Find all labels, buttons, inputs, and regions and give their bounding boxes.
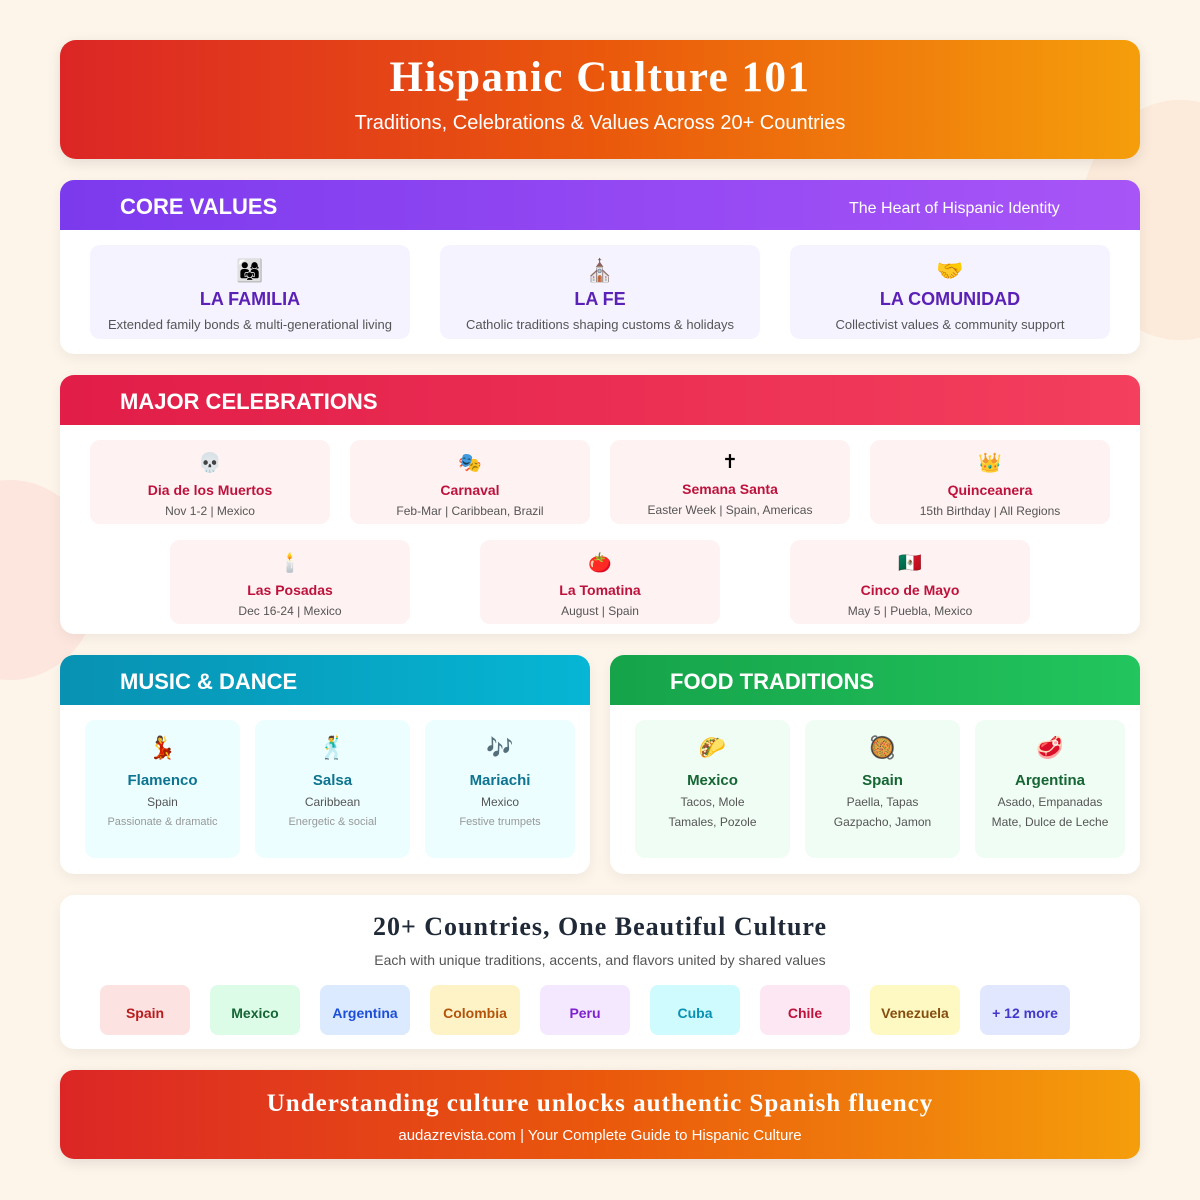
pills: countries: Cuba <box>678 1005 712 1021</box>
card: dia de los muertos: Dia de los Muertos <box>148 482 272 498</box>
card: cinco de mayo: 🇲🇽 <box>898 553 922 574</box>
card: la familia: LA FAMILIA <box>200 289 300 309</box>
card: flamenco: 💃 <box>149 735 176 760</box>
card: la comunidad: LA COMUNIDAD <box>880 289 1020 309</box>
pills: countries: Venezuela <box>881 1005 949 1021</box>
card: mexico food: Mexico <box>687 772 738 789</box>
card: quinceanera <box>870 440 1110 524</box>
card: semana santa: Semana Santa <box>682 481 778 497</box>
card: quinceanera: 👑 <box>978 453 1002 474</box>
header <box>60 40 1140 159</box>
pills: countries: Peru <box>569 1005 601 1021</box>
card: flamenco <box>85 720 240 858</box>
card: mexico food: 🌮 <box>699 735 726 760</box>
card: la comunidad: 🤝 <box>936 258 964 283</box>
card: carnaval: 🎭 <box>458 453 482 474</box>
pills: countries: + 12 more <box>992 1005 1058 1021</box>
card: salsa: Energetic & social <box>288 816 377 828</box>
card: la fe: ⛪ <box>586 258 614 283</box>
panel: core values <box>60 180 1140 354</box>
card: mariachi: Mariachi <box>470 772 530 789</box>
card: la tomatina: La Tomatina <box>559 582 641 598</box>
card: mexico food <box>635 720 790 858</box>
card: spain food: 🥘 <box>869 735 896 760</box>
card: spain food: Paella, Tapas <box>847 795 918 809</box>
pills: countries: Colombia <box>443 1005 507 1021</box>
card: dia de los muertos: Nov 1-2 | Mexico <box>165 504 255 518</box>
panel: music & dance <box>60 655 590 874</box>
heading: music & dance: MUSIC & DANCE <box>120 669 297 694</box>
heading: core values <box>60 180 1140 230</box>
heading: music & dance <box>60 655 590 705</box>
subtitle: Traditions, Celebrations & Values Across 20+ Countries <box>355 112 845 134</box>
card: mariachi: 🎶 <box>486 735 514 760</box>
heading: food traditions: FOOD TRADITIONS <box>670 669 874 694</box>
card: las posadas: 🕯️ <box>278 553 302 574</box>
card: salsa: Caribbean <box>305 795 360 809</box>
card: flamenco: Spain <box>147 795 178 809</box>
card: carnaval: Feb-Mar | Caribbean, Brazil <box>396 504 544 518</box>
heading: core values: CORE VALUES <box>120 194 277 219</box>
card: salsa <box>255 720 410 858</box>
title: Hispanic Culture 101 <box>389 54 811 101</box>
card: las posadas: Las Posadas <box>247 582 333 598</box>
card: las posadas <box>170 540 410 624</box>
card: argentina food: 🥩 <box>1036 735 1064 760</box>
card: flamenco: Flamenco <box>127 772 198 789</box>
pills: countries: Mexico <box>231 1005 279 1021</box>
card: flamenco: Passionate & dramatic <box>107 816 218 828</box>
card: mariachi <box>425 720 575 858</box>
card: la familia <box>90 245 410 339</box>
card: dia de los muertos: 💀 <box>198 453 222 474</box>
card: spain food: Gazpacho, Jamon <box>834 815 931 829</box>
card: semana santa: Easter Week | Spain, Americas <box>648 503 812 517</box>
card: argentina food: Asado, Empanadas <box>998 795 1102 809</box>
card: la familia: 👨‍👩‍👧 <box>236 258 264 283</box>
card: cinco de mayo: May 5 | Puebla, Mexico <box>848 604 972 618</box>
card: argentina food <box>975 720 1125 858</box>
heading: major celebrations <box>60 375 1140 425</box>
card: carnaval <box>350 440 590 524</box>
heading: countries: 20+ Countries, One Beautiful Culture <box>373 912 827 941</box>
text: countries subtitle: Each with unique traditions, accents, and flavors united by shared values <box>374 952 826 968</box>
panel: major celebrations <box>60 375 1140 634</box>
card: spain food: Spain <box>862 772 903 789</box>
pills: countries: Chile <box>788 1005 822 1021</box>
card: la tomatina <box>480 540 720 624</box>
heading: food traditions <box>610 655 1140 705</box>
card: quinceanera: 15th Birthday | All Regions <box>920 504 1060 518</box>
card: la fe <box>440 245 760 339</box>
card: la comunidad <box>790 245 1110 339</box>
card: la tomatina: August | Spain <box>561 604 639 618</box>
panel: countries <box>60 895 1140 1049</box>
card: salsa: 🕺 <box>319 735 346 760</box>
card: la tomatina: 🍅 <box>588 553 612 574</box>
card: mexico food: Tacos, Mole <box>680 795 745 809</box>
heading: core values: The Heart of Hispanic Identity <box>849 200 1060 217</box>
card: cinco de mayo: Cinco de Mayo <box>861 582 959 598</box>
card: semana santa: ✝ <box>722 452 738 473</box>
pills: countries: Argentina <box>332 1005 398 1021</box>
card: dia de los muertos <box>90 440 330 524</box>
pills: countries <box>100 985 1070 1035</box>
card: salsa: Salsa <box>313 772 352 789</box>
card: la fe: Catholic traditions shaping customs & holidays <box>466 317 734 332</box>
card: quinceanera: Quinceanera <box>948 482 1032 498</box>
heading: major celebrations: MAJOR CELEBRATIONS <box>120 389 378 414</box>
card: mariachi: Mexico <box>481 795 519 809</box>
card: mariachi: Festive trumpets <box>459 816 541 828</box>
card: la comunidad: Collectivist values & community support <box>835 317 1065 332</box>
card: argentina food: Mate, Dulce de Leche <box>992 815 1108 829</box>
footer <box>60 1070 1140 1159</box>
card: argentina food: Argentina <box>1015 772 1085 789</box>
footer subtitle: audazrevista.com | Your Complete Guide to Hispanic Culture <box>398 1127 802 1144</box>
card: semana santa <box>610 440 850 524</box>
card: cinco de mayo <box>790 540 1030 624</box>
card: spain food <box>805 720 960 858</box>
card: la familia: Extended family bonds & multi-generational living <box>108 317 392 332</box>
panel: food traditions <box>610 655 1140 874</box>
card: las posadas: Dec 16-24 | Mexico <box>238 604 342 618</box>
card: mexico food: Tamales, Pozole <box>668 815 757 829</box>
pills: countries: Spain <box>126 1005 164 1021</box>
card: la fe: LA FE <box>574 289 626 309</box>
card: carnaval: Carnaval <box>440 482 500 498</box>
footer title: Understanding culture unlocks authentic Spanish fluency <box>267 1090 933 1117</box>
